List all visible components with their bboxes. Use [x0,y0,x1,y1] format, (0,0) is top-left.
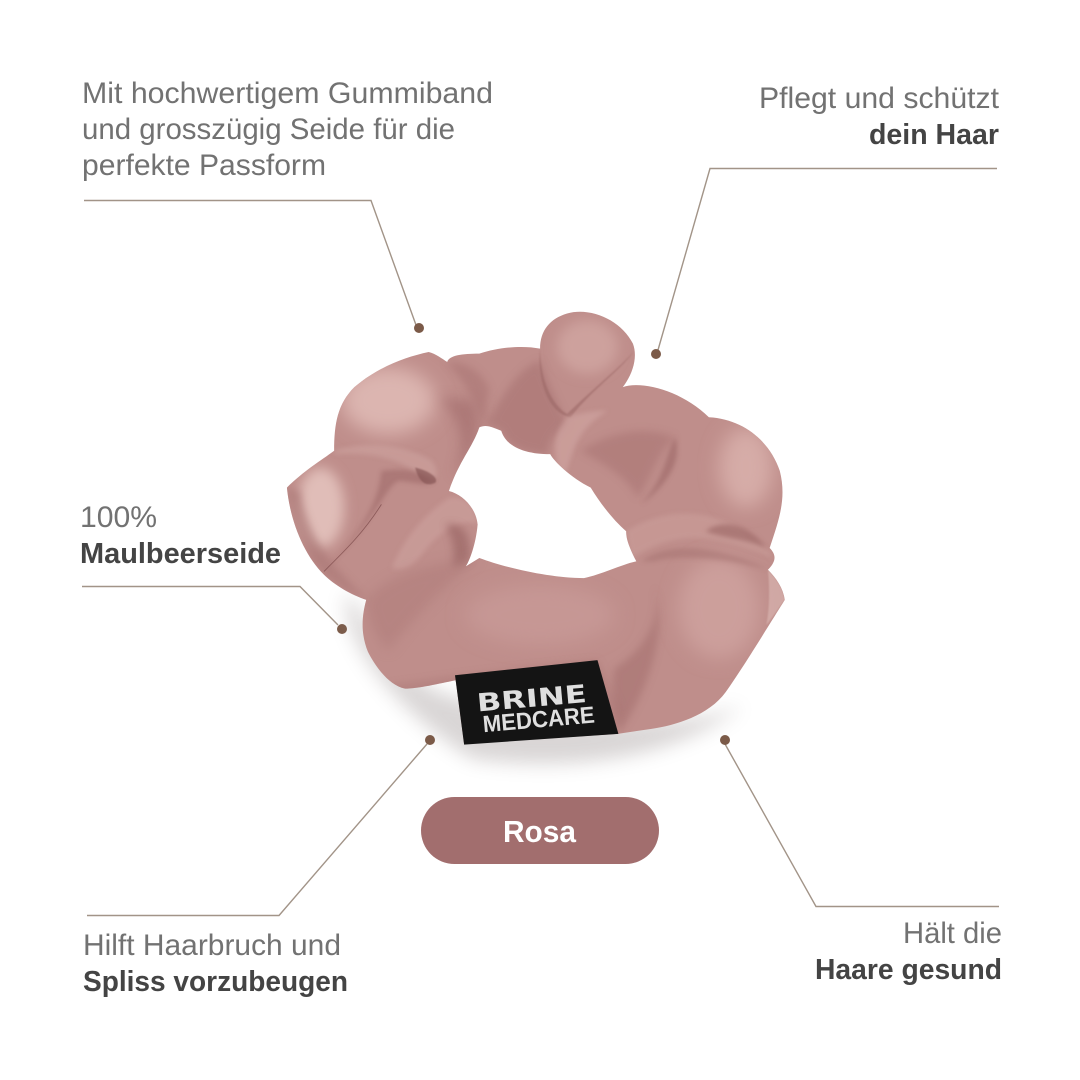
callout: Maulbeerseide: 100% [80,501,157,534]
callout: Gummiband text [82,77,493,182]
tag logo text [476,679,596,738]
colour pill: Rosa: Rosa [503,814,577,849]
leader line: Gummiband [84,200,424,333]
callout: Maulbeerseide [80,501,281,570]
callout: Haarbruch [83,929,348,998]
leader line: Haare gesund [720,735,999,906]
callout: Gummiband text: perfekte Passform [82,149,326,182]
callout: Maulbeerseide: Maulbeerseide [80,538,281,570]
highlights and folds [287,320,785,759]
callout: Haarbruch: Spliss vorzubeugen [83,966,348,998]
callout: Haare gesund: Haare gesund [815,954,1002,986]
callout: Haarbruch: Hilft Haarbruch und [83,929,341,962]
callout: Gummiband text: Mit hochwertigem Gummiband [82,77,493,110]
callout: Pflegt und schützt: dein Haar [869,119,999,151]
callout: Pflegt und schützt: Pflegt und schützt [759,82,999,115]
tag logo text: BRINE [476,679,588,717]
shadow beneath scrunchie [346,592,743,764]
colour pill: Rosa [421,797,659,864]
callout: Haare gesund [815,917,1002,986]
scrunchie product illustration [287,312,785,771]
silk body [287,312,785,742]
tag logo text: MEDCARE [482,702,596,737]
callout: Haare gesund: Hält die [903,917,1002,950]
callout: Gummiband text: und grosszügig Seide für die [82,113,455,146]
leader line: Haarbruch [87,735,435,916]
leader line: Pflegt [651,168,997,359]
leader line: Maulbeerseide [82,586,347,634]
brand tag [455,660,618,745]
callout: Pflegt und schützt [759,82,999,151]
